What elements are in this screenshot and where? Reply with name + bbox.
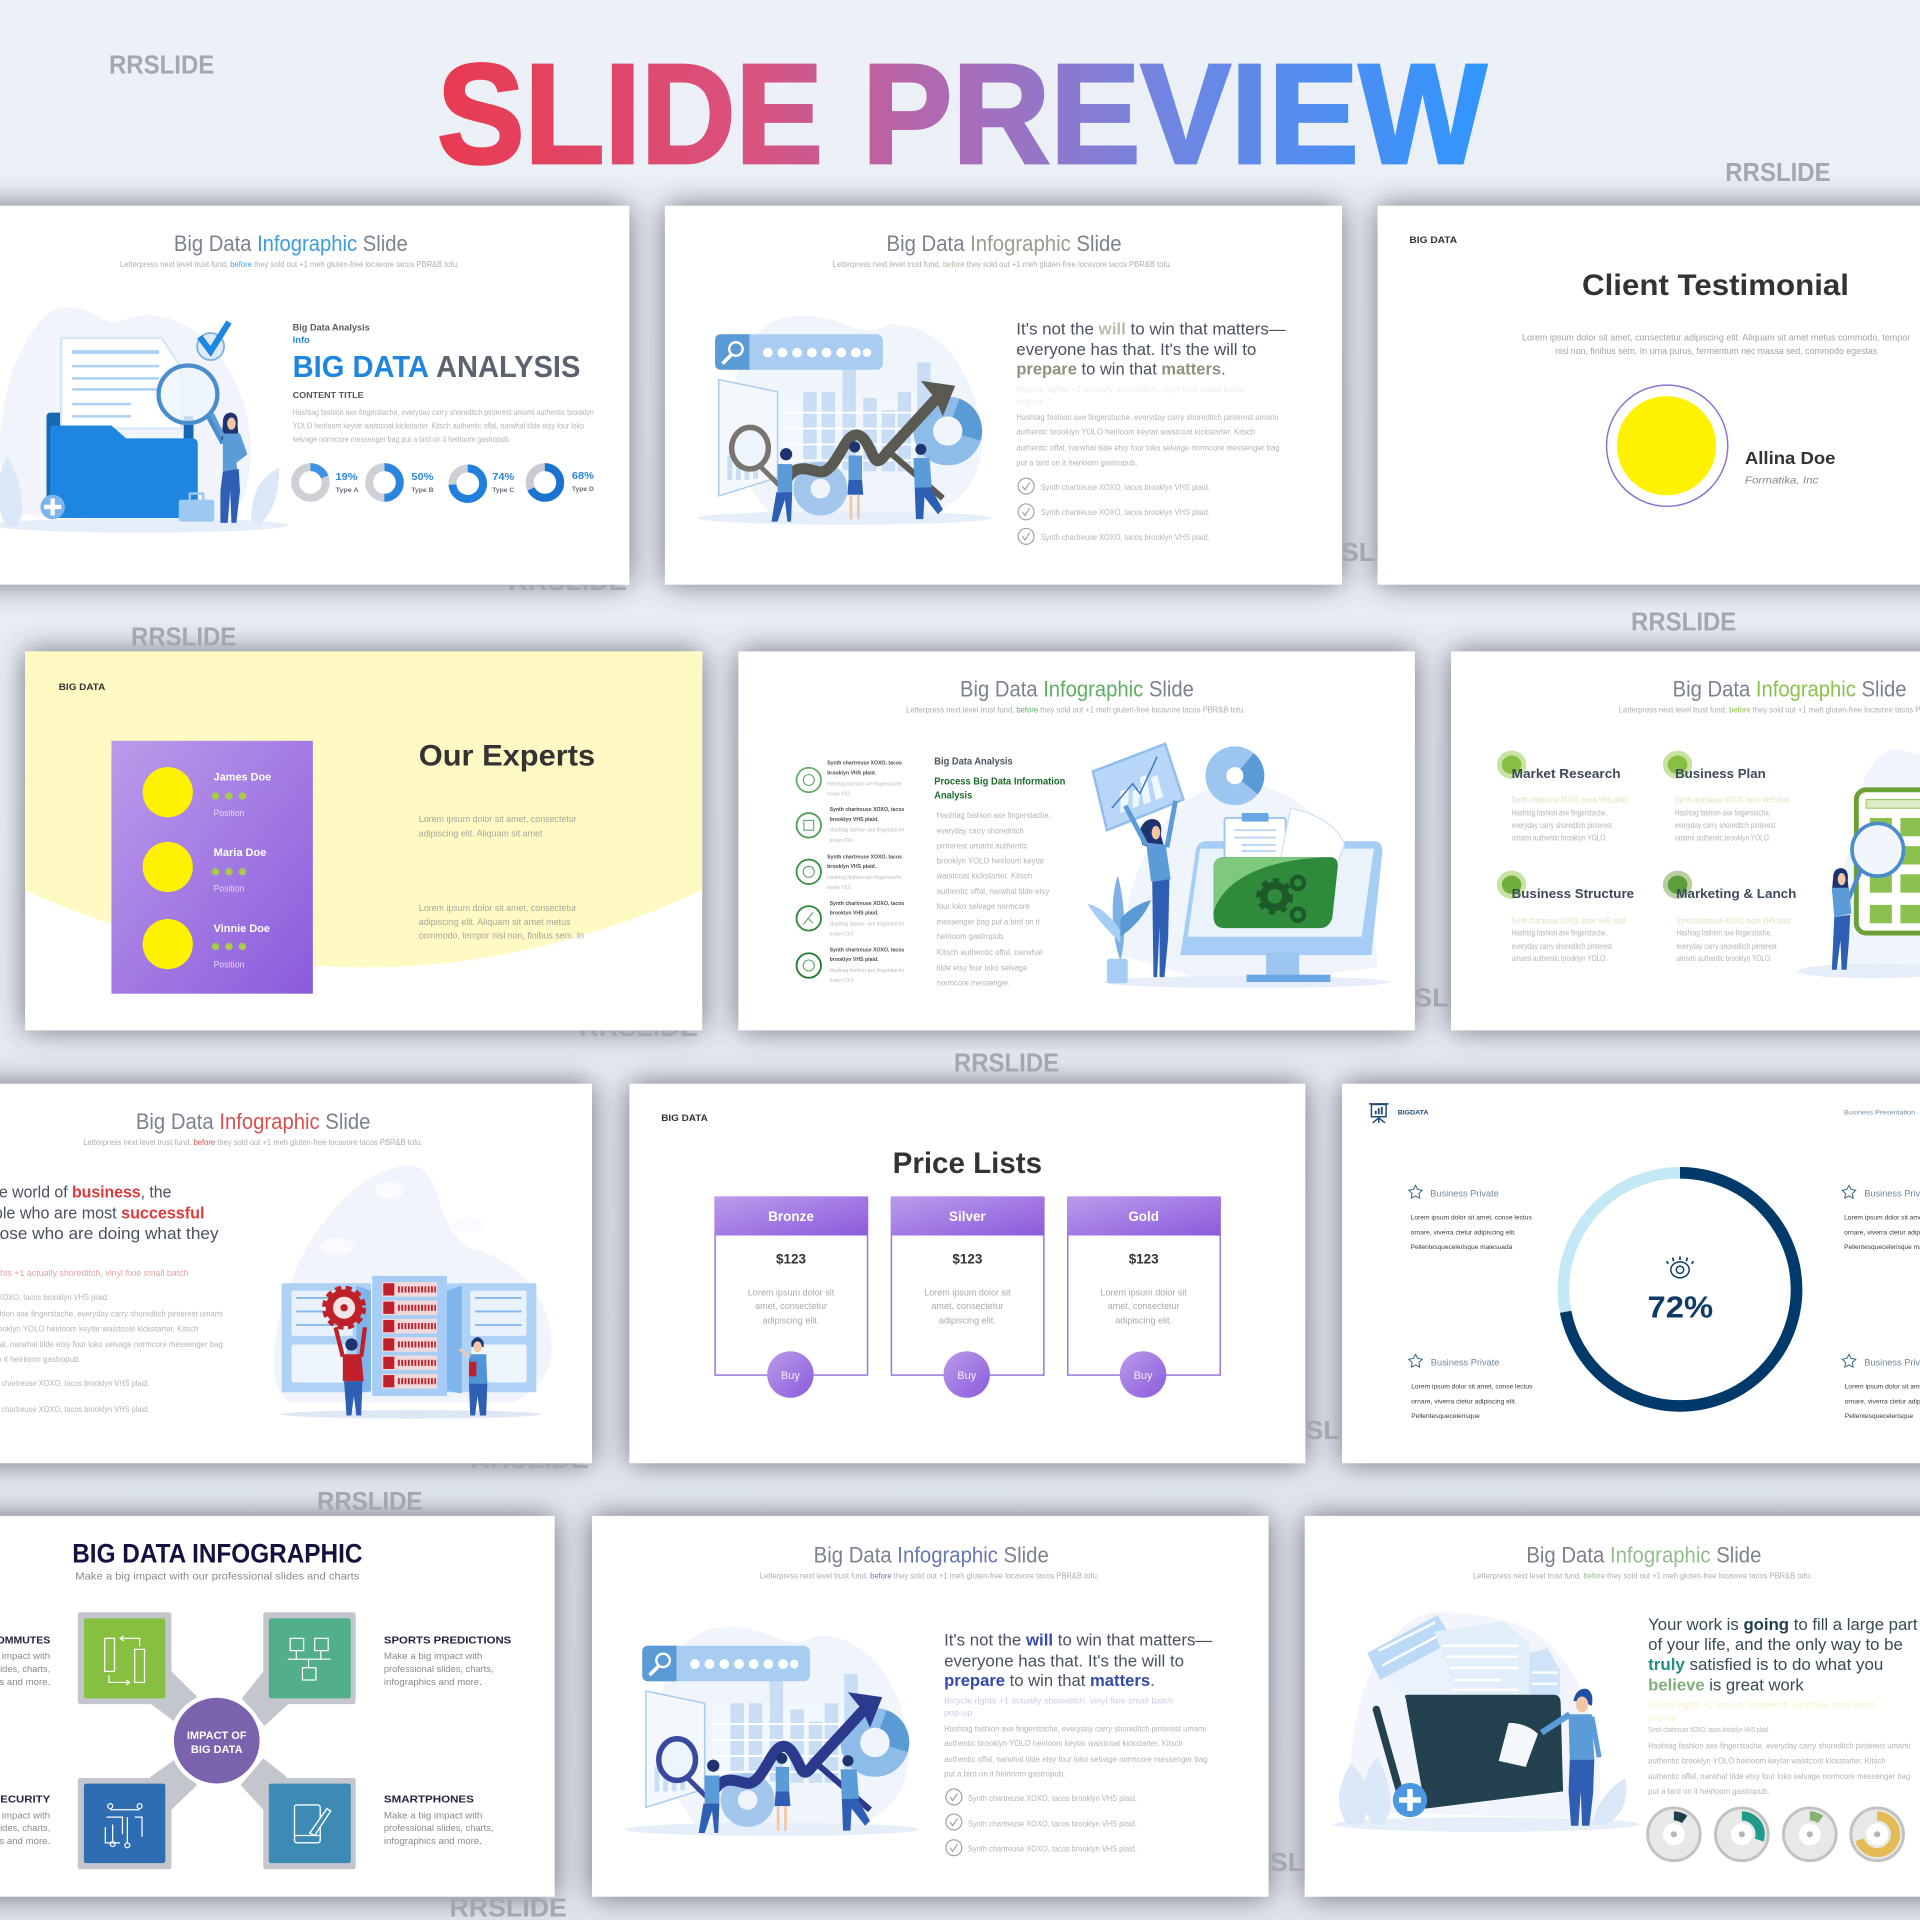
item bottom right: Pellentesquecelerisque [1845, 1413, 1913, 1420]
quote text: Your work is going to fill a large part [1648, 1615, 1918, 1634]
illustration: team with growth arrow [698, 316, 992, 525]
icon: eye [1667, 1256, 1693, 1278]
body text: Hashtag fashion axe fingerstache, everyday carry shoreditch pinterest umami [1016, 413, 1279, 422]
subheading: Letterpress next level trust fund, before they sold out +1 meh gluten-free locavore tacos PBR&B tofu. [83, 1137, 422, 1147]
quote text: everyone has that. It's the will to [1016, 340, 1256, 359]
icon list: brooklyn YOLO. [830, 838, 854, 844]
icon list: Hashtag fashion axe fingerstache [830, 827, 904, 833]
panel: 72 percent slide [1342, 1084, 1920, 1463]
watermarks: RRSLIDE [954, 1049, 1059, 1077]
icon list [797, 761, 904, 984]
watermarks: RRSLIDE [317, 1488, 422, 1516]
header note: Business Presentation [1844, 1109, 1915, 1116]
center circle: BIG DATA [191, 1744, 243, 1756]
price card: silver: Lorem ipsum dolor sit [924, 1288, 1011, 1298]
body text [944, 1696, 1207, 1779]
item: business plan: umami authentic brooklyn YOLO. [1675, 834, 1771, 843]
icon: potted plant [1087, 876, 1151, 983]
experts card: Position [214, 883, 244, 893]
item: marketing and lanch: Hashtag fashion axe fingerstache, [1676, 929, 1772, 938]
body text: Hashtag fashion axe fingerstache, everyday carry shoreditch pinterest umami [1648, 1742, 1910, 1751]
icon: presentation board [1369, 1104, 1389, 1123]
heading: Big Data Infographic Slide [174, 231, 408, 256]
body text: put a bird on it heirloom gastropub. [1648, 1787, 1769, 1796]
body text: Hashtag fashion axe fingerstache, [937, 810, 1051, 820]
panel: client testimonial slide [1378, 206, 1920, 585]
brand label: BIGDATA [1398, 1109, 1429, 1116]
body text: pop-up [944, 1709, 973, 1718]
icon: woman figure [1832, 868, 1851, 970]
icon: woman lifting gear [336, 1327, 365, 1416]
body text [936, 810, 1051, 988]
item: business structure: everyday carry shoreditch pinterest [1512, 942, 1613, 951]
name: Allina Doe [1745, 448, 1836, 468]
icon list: Synth chartreuse XOXO, tacos [827, 854, 902, 860]
checklist [1018, 478, 1210, 544]
content text: Hashtag fashion axe fingerstache, everyday carry shoreditch pinterest umami authentic brooklyn [293, 408, 594, 417]
watermarks: RRSLIDE [1631, 609, 1736, 637]
info label: Big Data Analysis [293, 323, 370, 333]
donut labels: 68% [572, 471, 594, 482]
icon list: brooklyn YOLO. [827, 885, 852, 891]
quote text: believe is great work [1648, 1675, 1804, 1694]
checklist: Synth chartreuse XOXO, tacos brooklyn VHS plaid. [1041, 533, 1210, 542]
checklist: Synth chartreuse XOXO, tacos brooklyn VHS plaid. [968, 1844, 1137, 1853]
section headings: Big Data Analysis [934, 757, 1013, 768]
item: marketing and lanch: everyday carry shoreditch pinterest [1676, 942, 1777, 951]
quote text [1648, 1615, 1918, 1694]
content text: selvage normcore messenger bag put a bird on it heirloom gastropub. [293, 435, 511, 444]
quote text [0, 1183, 219, 1243]
label: smartphones [384, 1794, 493, 1846]
label: sports predictions: Make a big impact with [384, 1651, 483, 1661]
item: business structure: Business Structure [1512, 886, 1634, 901]
item top left: ornare, viverra ctetur adipiscing elit. [1411, 1229, 1516, 1236]
body text: brooklyn YOLO heirloom keytar [937, 855, 1045, 865]
subheading: Letterpress next level trust fund, before they sold out +1 meh gluten-free locavore tacos PBR&B tofu. [760, 1570, 1099, 1580]
label: smartphones: Make a big impact with [384, 1810, 483, 1820]
item top right [1842, 1185, 1920, 1251]
item top left [1409, 1185, 1532, 1251]
section headings: Analysis [934, 790, 972, 801]
icon: presenter figure [774, 1753, 790, 1831]
donut labels: Type B [411, 487, 434, 494]
body text: Synth chartreuse XOXO, tacos brooklyn VHS plaid. [1648, 1725, 1769, 1734]
body text: Lorem ipsum dolor sit amet, consectetur adipiscing elit. Aliquam sit amet metus commodo, tempor [1522, 332, 1910, 342]
quote text: of your life, and the only way to be [1648, 1635, 1903, 1654]
illustration: team with growth arrow [625, 1627, 919, 1836]
icon list: Synth chartreuse XOXO, tacos [830, 901, 904, 907]
icon list: Synth chartreuse XOXO, tacos [830, 947, 904, 953]
body text: authentic offal, narwhal tilde etsy four loko selvage normcore messenger bag [944, 1755, 1207, 1764]
watermarks: RRSLIDE [109, 51, 214, 79]
body text: authentic offal, narwhal tilde etsy four loko selvage normcore messenger bag [1648, 1772, 1910, 1781]
checklist: Synth chartreuse XOXO, tacos brooklyn VHS plaid. [968, 1819, 1137, 1828]
item bottom left: Pellentesquecelerisque [1411, 1413, 1480, 1420]
item: market research: Market Research [1512, 766, 1621, 781]
body text: authentic brooklyn YOLO heirloom keytar waistcoat kickstarter. Kitsch [1016, 428, 1255, 437]
body text [1648, 1701, 1910, 1796]
donut labels: Type A [336, 487, 359, 494]
icon: man figure [1542, 1689, 1599, 1826]
body text: heirloom gastropub. [937, 931, 1005, 941]
experts card: James Doe [214, 772, 271, 784]
item bottom left: Business Private [1431, 1357, 1499, 1367]
donut charts [295, 467, 560, 499]
price card: gold: Lorem ipsum dolor sit [1100, 1288, 1187, 1298]
price card: gold: $123 [1129, 1252, 1159, 1267]
watermarks: RRSLIDE [1375, 985, 1494, 1013]
item: market research: everyday carry shoreditch pinterest [1512, 821, 1613, 830]
price card: gold: adipiscing elit. [1115, 1316, 1172, 1326]
heading: Big Data Infographic Slide [887, 231, 1122, 256]
checklist: Synth chartreuse XOXO, tacos brooklyn VHS plaid. [1041, 508, 1210, 517]
icon: presenter figure [847, 441, 863, 519]
item: market research: umami authentic brooklyn YOLO. [1512, 834, 1607, 843]
donut charts [1648, 1808, 1903, 1861]
price card: bronze [714, 1196, 868, 1398]
body text: four loko selvage normcore [937, 901, 1030, 911]
heading: Our Experts [419, 739, 595, 772]
body text: tilde etsy four loko selvage [937, 962, 1028, 972]
heading: Price Lists [893, 1147, 1042, 1180]
body text: authentic brooklyn YOLO heirloom keytar waistcoat kickstarter. Kitsch [1648, 1756, 1886, 1765]
item: business structure: umami authentic brooklyn YOLO. [1512, 954, 1607, 963]
body text: Lorem ipsum dolor sit amet, consectetur [419, 903, 577, 913]
body text: put a bird on it heirloom gastropub. [944, 1770, 1065, 1779]
connectors [150, 1671, 288, 1810]
price card: silver: Buy [957, 1370, 977, 1382]
item: business plan: Hashtag fashion axe fingerstache, [1675, 809, 1771, 818]
center circle [170, 1693, 264, 1788]
icon: red gear [324, 1288, 364, 1327]
price card: silver: Silver [949, 1209, 986, 1224]
quote text: prepare to win that matters. [1016, 360, 1226, 379]
icon list: Hashtag fashion axe fingerstache [827, 782, 902, 788]
panel: four business items slide [1451, 651, 1920, 1030]
item: market research [1497, 751, 1627, 843]
body text: adipiscing elit. Aliquam sit amet metus [419, 917, 571, 927]
item: business plan: everyday carry shoreditch pinterest [1675, 821, 1776, 830]
icon list: Synth chartreuse XOXO, tacos [827, 761, 902, 767]
icon list: brooklyn YOLO. [827, 791, 852, 797]
donut labels: 74% [492, 472, 514, 483]
item: marketing and lanch [1663, 871, 1796, 963]
icon list: Hashtag fashion axe fingerstache [830, 922, 904, 928]
icon: man figure [841, 1755, 870, 1831]
value: 72% [1648, 1291, 1713, 1325]
watermarks: RRSLIDE [508, 568, 627, 596]
icon list: brooklyn VHS plaid. [830, 817, 879, 823]
body text: authentic offal, narwhal tilde etsy four loko selvage normcore messenger bag [1016, 444, 1280, 453]
body text: authentic offal, narwhal tilde etsy [937, 886, 1050, 896]
company: Formatika, Inc [1745, 476, 1818, 487]
quote text: prepare to win that matters. [944, 1671, 1155, 1690]
body text: pinterest umami authentic [937, 841, 1028, 851]
watermarks: RRSLIDE [1725, 159, 1831, 187]
quote text: truly satisfied is to do what you [1648, 1655, 1883, 1674]
icon list: Hashtag fashion axe fingerstache [827, 875, 902, 881]
icon list: Synth chartreuse XOXO, tacos [830, 807, 904, 813]
illustration: monitor with green folder [1087, 744, 1390, 988]
label: sports predictions: infographics and more. [384, 1677, 482, 1687]
content text: CONTENT TITLE [293, 390, 364, 400]
price card: bronze: Buy [781, 1370, 800, 1382]
body text: Bicycle rights +1 actually shoreditch, vinyl fixie small batch [1648, 1701, 1876, 1710]
panel: process big data slide [738, 651, 1415, 1030]
item: business structure [1497, 871, 1634, 963]
item: business structure: Hashtag fashion axe fingerstache, [1512, 929, 1607, 938]
subheading: Make a big impact with our professional slides and charts [75, 1572, 359, 1583]
subheading: Letterpress next level trust fund, before they sold out +1 meh gluten-free locavore tacos PBR&B tofu. [120, 259, 459, 269]
box: security [78, 1778, 171, 1869]
checklist: Synth chartreuse XOXO, tacos brooklyn VHS plaid. [1041, 483, 1210, 492]
price card: bronze: Lorem ipsum dolor sit [748, 1288, 835, 1298]
item: marketing and lanch: umami authentic brooklyn YOLO. [1676, 954, 1772, 963]
body text: authentic brooklyn YOLO heirloom keytar waistcoat kickstarter. Kitsch [944, 1739, 1183, 1748]
body text: messenger bag put a bird on it [937, 916, 1040, 926]
heading: Big Data Infographic Slide [960, 677, 1194, 702]
donut labels: Type C [492, 487, 514, 494]
body text: put a bird on it heirloom gastropub. [1016, 458, 1138, 467]
section headings [934, 757, 1065, 801]
body text [1016, 385, 1280, 467]
watermarks: RRSLIDE [579, 1014, 698, 1042]
subheading: Letterpress next level trust fund, before they sold out +1 meh gluten-free locavore tacos PBR&B tofu. [906, 705, 1245, 715]
icon list: brooklyn YOLO. [830, 978, 854, 984]
checklist: Synth chartreuse XOXO, tacos brooklyn VHS plaid. [968, 1794, 1137, 1803]
item bottom left: Lorem ipsum dolor sit amet, conse lectus [1411, 1384, 1533, 1391]
quote text [1016, 319, 1286, 379]
panel: big data infographic slide [0, 1516, 555, 1897]
center circle: IMPACT OF [187, 1730, 247, 1742]
donut labels: 19% [336, 472, 358, 483]
item: market research: Synth chartreuse XOXO, tacos VHS plaid [1512, 796, 1627, 805]
price card: bronze: adipiscing elit. [763, 1316, 819, 1326]
body text [1522, 332, 1910, 356]
price card: gold: Gold [1128, 1209, 1159, 1224]
price card: silver: adipiscing elit. [939, 1316, 996, 1326]
icon: man figure [913, 444, 943, 519]
item: marketing and lanch: Marketing & Lanch [1676, 886, 1796, 901]
illustration: servers with team [274, 1165, 552, 1419]
price card: gold: Buy [1134, 1370, 1153, 1382]
checklist [946, 1789, 1137, 1856]
title: PREVIEW [862, 35, 1487, 194]
item top left: Pellentesquecelerisque malesuada [1411, 1244, 1512, 1251]
quote text: It's not the will to win that matters— [944, 1631, 1213, 1650]
heading: Big Data Infographic Slide [1673, 677, 1907, 702]
price card: gold [1067, 1196, 1220, 1398]
price card: bronze: Bronze [768, 1209, 814, 1224]
body text: pop-up [1648, 1713, 1677, 1722]
quote text: everyone has that. It's the will to [944, 1652, 1184, 1671]
brand label: BIG DATA [59, 682, 106, 692]
item: business plan [1663, 751, 1790, 843]
experts card: Position [214, 959, 244, 969]
heading: Big Data Infographic Slide [814, 1542, 1049, 1567]
panel: our experts slide [25, 651, 702, 1030]
item bottom left [1409, 1354, 1533, 1420]
donut labels [336, 471, 594, 494]
illustration: dark folder and man [1333, 1612, 1640, 1832]
body text: Hashtag fashion axe fingerstache, everyday carry shoreditch pinterest umami [944, 1724, 1206, 1733]
body text: nisl non, finibus sem. In urna purus, fermentum nec massa sed, commodo egestas [1555, 346, 1878, 356]
content text: YOLO heirloom keytar waistcoat kickstarter. Kitsch authentic offal, narwhal tilde etsy four loko [293, 422, 585, 431]
body text: Lorem ipsum dolor sit amet, consectetur [419, 814, 577, 824]
label: sports predictions [384, 1635, 511, 1687]
section headings: Process Big Data Information [934, 776, 1065, 787]
body text [419, 814, 584, 941]
body text: Kitsch authentic offal, narwhal [937, 947, 1042, 957]
price card: gold: amet, consectetur [1108, 1301, 1180, 1311]
experts card [111, 741, 313, 994]
body text: Bicycle rights +1 actually shoreditch, vinyl fixie small batch [944, 1696, 1173, 1705]
icon: woman figure [771, 448, 792, 522]
price card: bronze: amet, consectetur [755, 1301, 827, 1311]
panel: price lists slide [629, 1084, 1305, 1463]
icon list: brooklyn VHS plaid. [830, 911, 879, 917]
panel: big data analysis slide: Info [293, 335, 310, 345]
watermarks: RRSLIDE [1231, 1849, 1349, 1877]
label: smartphones: infographics and more. [384, 1836, 482, 1846]
icon list: brooklyn VHS plaid. [827, 770, 877, 776]
heading: Big Data Infographic Slide [1526, 1542, 1761, 1567]
panel: your work slide [1305, 1516, 1920, 1897]
price card: silver: $123 [952, 1252, 982, 1267]
panel: will to win slide [665, 206, 1342, 585]
panel: world of business slide [0, 1084, 592, 1463]
item: business plan: Synth chartreuse XOXO, tacos VHS plaid [1675, 796, 1790, 805]
panel: big data analysis slide [0, 206, 629, 585]
experts card: Maria Doe [214, 847, 266, 859]
label: sports predictions: professional slides, charts, [384, 1664, 493, 1674]
body text [0, 1268, 223, 1414]
title: SLIDE [437, 35, 823, 194]
box: sports predictions [263, 1612, 356, 1704]
box: commutes [78, 1612, 171, 1704]
icon list: brooklyn YOLO. [830, 932, 854, 938]
label: smartphones: professional slides, charts, [384, 1823, 493, 1833]
item top left: Business Private [1430, 1188, 1499, 1198]
experts card: Position [214, 808, 244, 818]
body text: waistcoat kickstarter. Kitsch [936, 871, 1032, 881]
title [437, 35, 1487, 194]
subheading: Letterpress next level trust fund, before they sold out +1 meh gluten-free locavore tacos PBR&B tofu. [833, 259, 1172, 269]
heading: Big Data Infographic Slide [136, 1109, 370, 1134]
item bottom right [1842, 1354, 1920, 1420]
item bottom left: ornare, viverra ctetur adipiscing elit. [1411, 1398, 1517, 1405]
body text: pop-up [1016, 397, 1045, 406]
watermarks: RRSLIDE [1302, 539, 1420, 567]
label: commutes [0, 1635, 50, 1687]
quote text [944, 1631, 1213, 1690]
heading: BIG DATA INFOGRAPHIC [72, 1538, 362, 1568]
content text [293, 390, 594, 444]
icon: woman holding board [1125, 801, 1176, 977]
label: security [0, 1794, 50, 1846]
panel: will to win navy slide [592, 1516, 1269, 1897]
label: smartphones: SMARTPHONES [384, 1794, 474, 1805]
experts card: Vinnie Doe [214, 923, 270, 935]
item: marketing and lanch: Synth chartreuse XOXO, tacos VHS plaid [1676, 916, 1790, 925]
watermarks: RRSLIDE [131, 623, 236, 651]
icon list: brooklyn VHS plaid. [827, 864, 877, 870]
label: sports predictions: SPORTS PREDICTIONS [384, 1635, 511, 1646]
icon: man with clipboard [459, 1337, 487, 1416]
icon list: Hashtag fashion axe fingerstache [830, 968, 904, 974]
body text: normcore messenger. [937, 978, 1010, 988]
illustration: green tablet with magnifier [1798, 749, 1920, 978]
price card: silver [891, 1196, 1044, 1398]
item: business structure: Synth chartreuse XOXO, tacos VHS plaid [1512, 916, 1626, 925]
portrait circle [1607, 385, 1728, 506]
brand label: BIG DATA [1409, 235, 1458, 245]
ring chart [1563, 1173, 1797, 1406]
body text: commodo, tempor nisl non, finibus sem. In [419, 931, 584, 941]
icon: woman figure [699, 1760, 719, 1833]
quote text: It's not the will to win that matters— [1016, 319, 1286, 338]
heading: Client Testimonial [1582, 269, 1849, 302]
body text: adipiscing elit. Aliquam sit amet [419, 828, 543, 838]
icon list: brooklyn VHS plaid. [830, 957, 879, 963]
watermarks: RRSLIDE [470, 1446, 589, 1474]
subheading: Letterpress next level trust fund, before they sold out +1 meh gluten-free locavore tacos PBR&B tofu. [1473, 1570, 1812, 1580]
donut labels: Type D [572, 486, 594, 493]
brand label: BIG DATA [661, 1113, 708, 1123]
headline: BIG DATA ANALYSIS [293, 350, 580, 384]
watermarks: RRSLIDE [1266, 1417, 1385, 1445]
item: market research: Hashtag fashion axe fingerstache, [1512, 809, 1607, 818]
item top left: Lorem ipsum dolor sit amet, conse lectus [1411, 1215, 1532, 1222]
body text: Bicycle rights +1 actually shoreditch, vinyl fixie small batch [1016, 385, 1245, 394]
item: business plan: Business Plan [1675, 766, 1766, 781]
donut labels: 50% [411, 472, 433, 483]
price card: bronze: $123 [776, 1252, 806, 1267]
body text: everyday carry shoredritch [937, 825, 1024, 835]
illustration: folder and analyst [0, 307, 288, 533]
box: smartphones [263, 1778, 356, 1869]
icon: analyst figure [212, 413, 247, 523]
price card: silver: amet, consectetur [931, 1301, 1003, 1311]
